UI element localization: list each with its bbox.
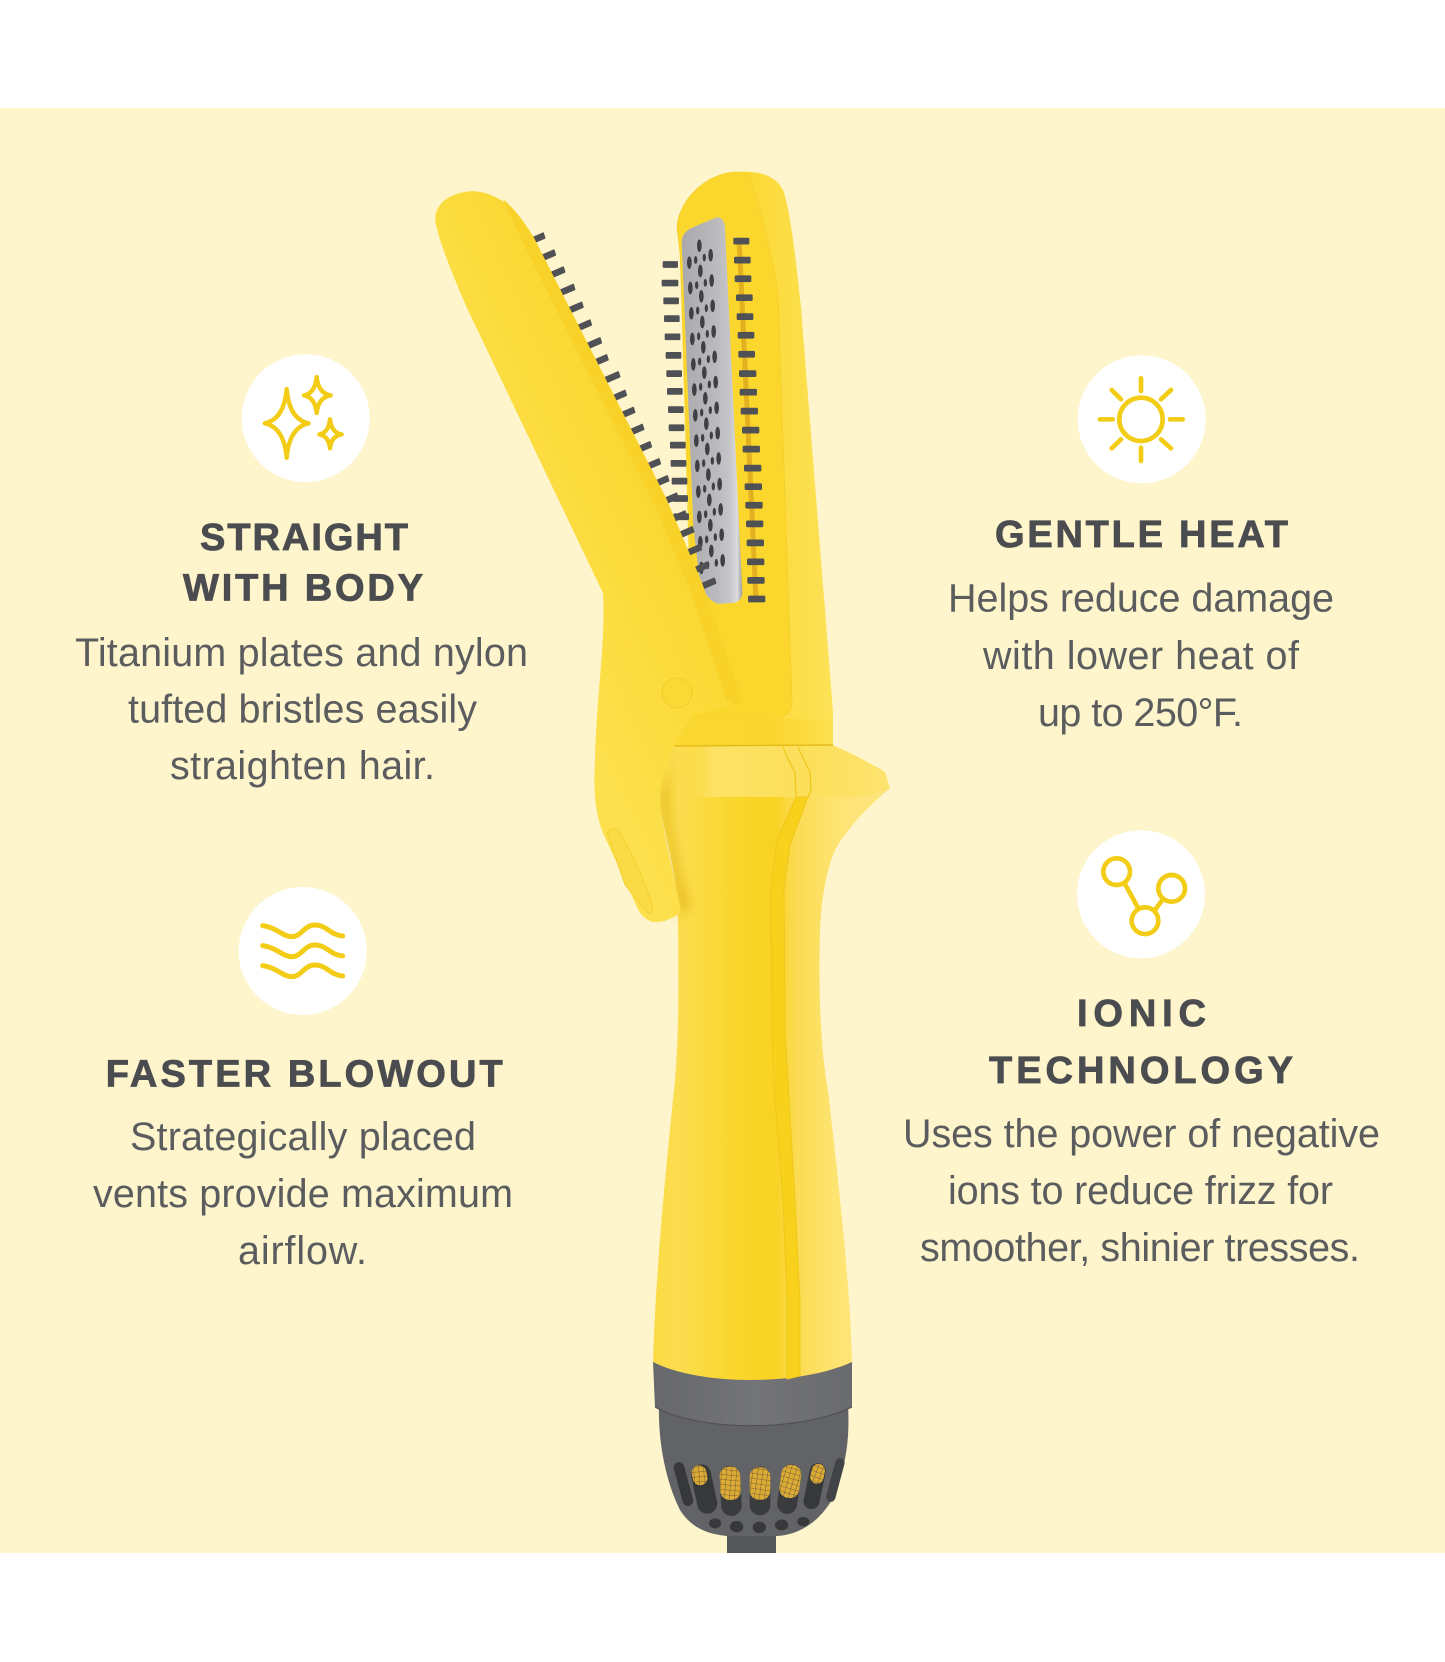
heading: WITH BODY <box>183 568 423 610</box>
product: styling tool illustration <box>435 172 890 1553</box>
description: with lower heat of <box>982 634 1300 678</box>
icon: sparkles <box>242 354 370 482</box>
heading <box>183 517 423 610</box>
handle barrel with flange <box>653 745 890 1380</box>
right plate bristles <box>733 238 765 602</box>
description: smoother, shinier tresses. <box>920 1226 1360 1270</box>
lever grip pad <box>607 828 653 913</box>
plate vent holes <box>687 239 725 574</box>
description: Uses the power of negative <box>903 1112 1380 1156</box>
description: airflow. <box>238 1229 367 1273</box>
cord <box>727 1525 776 1553</box>
lever shadow <box>660 750 690 920</box>
description: straighten hair. <box>170 744 435 788</box>
heading: STRAIGHT <box>200 517 408 559</box>
heading <box>989 993 1293 1092</box>
barrel seam <box>771 747 811 1379</box>
heading: FASTER BLOWOUT <box>106 1054 503 1096</box>
description: ions to reduce frizz for <box>948 1169 1333 1213</box>
pivot button <box>662 678 692 708</box>
description: Helps reduce damage <box>948 577 1334 621</box>
titanium plate <box>682 217 742 604</box>
icon: waves <box>239 887 367 1015</box>
description: tufted bristles easily <box>128 688 477 732</box>
description <box>903 1112 1380 1270</box>
feature: ionic technology <box>903 830 1380 1270</box>
feature: faster blowout <box>93 887 513 1273</box>
description <box>948 577 1334 735</box>
vent slots <box>672 1457 846 1533</box>
plate housing panel <box>677 172 792 718</box>
description: Titanium plates and nylon <box>75 631 528 675</box>
upper body <box>677 172 833 745</box>
grey vented base <box>653 1362 852 1536</box>
icon: molecule <box>1077 830 1205 958</box>
description: up to 250°F. <box>1038 691 1243 735</box>
description <box>75 631 528 788</box>
flap lever arm <box>435 191 742 922</box>
description: Strategically placed <box>130 1115 476 1159</box>
feature: straight with body <box>75 354 528 788</box>
icon: sun <box>1078 355 1206 483</box>
description <box>93 1115 513 1273</box>
heading: IONIC <box>1077 993 1206 1035</box>
comb stems <box>739 238 756 600</box>
neck ring <box>673 719 833 746</box>
left plate bristles <box>662 261 689 520</box>
flap bristles <box>528 232 717 590</box>
description: vents provide maximum <box>93 1172 513 1216</box>
flap bevel <box>503 199 742 705</box>
heading: TECHNOLOGY <box>989 1050 1293 1092</box>
heading: GENTLE HEAT <box>995 514 1288 556</box>
bristles and titanium plate <box>662 217 765 604</box>
flared shoulder <box>690 746 890 797</box>
feature: gentle heat <box>948 355 1334 735</box>
